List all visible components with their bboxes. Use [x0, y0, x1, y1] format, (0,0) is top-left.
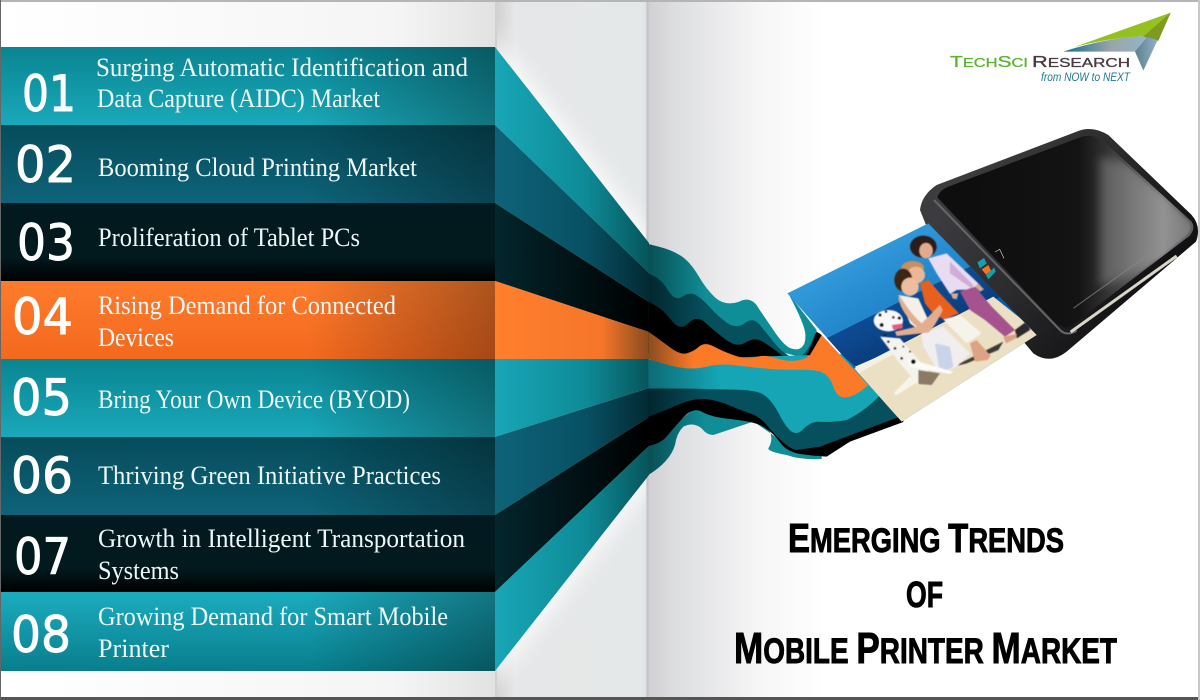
trend bar 01: [1, 47, 495, 125]
trend bar 01: 01: [22, 65, 76, 123]
folded ribbon fan between the bars and the fold: [495, 47, 649, 671]
trend bar 05: Bring Your Own Device (BYOD): [98, 385, 410, 414]
title: Emerging Trends of Mobile Printer Market: [734, 515, 1117, 673]
wavy ribbon streams flowing into the photo: [648, 244, 903, 475]
trend bar 04: Rising Demand for Connected: [98, 291, 396, 320]
icon: mobile printer with emerging photo: [780, 129, 1200, 427]
trend bar 03: Proliferation of Tablet PCs: [98, 223, 360, 252]
title: Emerging Trends of Mobile Printer Market: OF: [906, 574, 943, 615]
trend bar 03: [1, 203, 495, 281]
logo: TechSci Research: TECH S CI: [950, 54, 1028, 71]
printed family photo: [788, 224, 1036, 422]
trend bar 04: Devices: [98, 323, 174, 352]
logo: TechSci Research: [950, 13, 1171, 84]
title: Emerging Trends of Mobile Printer Market: MOBILE PRINTER MARKET: [734, 624, 1117, 673]
trend bar 05: 05: [11, 369, 72, 427]
trend bar 04: 04: [12, 288, 73, 346]
trend bar 04: [1, 281, 495, 359]
trend bar 08: [1, 592, 495, 671]
trend bar 06: Thriving Green Initiative Practices: [98, 461, 441, 490]
logo: TechSci Research: from NOW to NEXT: [1041, 72, 1131, 84]
trend bar 03: 03: [17, 214, 75, 272]
trend bar 08: Growing Demand for Smart Mobile: [98, 602, 448, 631]
trend bar 06: [1, 437, 495, 515]
trend bar 01: Surging Automatic Identification and: [96, 53, 468, 82]
trend bar 02: 02: [15, 136, 76, 194]
printer body: [920, 129, 1200, 359]
trend bar 08: Printer: [98, 634, 169, 663]
trend bar 06: 06: [11, 447, 73, 505]
title: Emerging Trends of Mobile Printer Market: EMERGING TRENDS: [788, 515, 1064, 561]
trend bar 05: [1, 359, 495, 437]
icon: logo arrow: [1063, 13, 1171, 71]
trend bar 07: Systems: [98, 556, 179, 585]
trend bar 07: Growth in Intelligent Transportation: [98, 524, 465, 553]
trend bar 01: Data Capture (AIDC) Market: [97, 84, 381, 113]
trend bar 02: Booming Cloud Printing Market: [98, 153, 418, 182]
logo: TechSci Research: R ESEARCH: [1032, 54, 1130, 71]
trend bar 07: [1, 515, 495, 592]
trend bar 08: 08: [11, 606, 71, 664]
trend bar 02: [1, 125, 495, 203]
trend bar 07: 07: [14, 528, 71, 586]
panel: list of eight trends: [1, 47, 495, 671]
